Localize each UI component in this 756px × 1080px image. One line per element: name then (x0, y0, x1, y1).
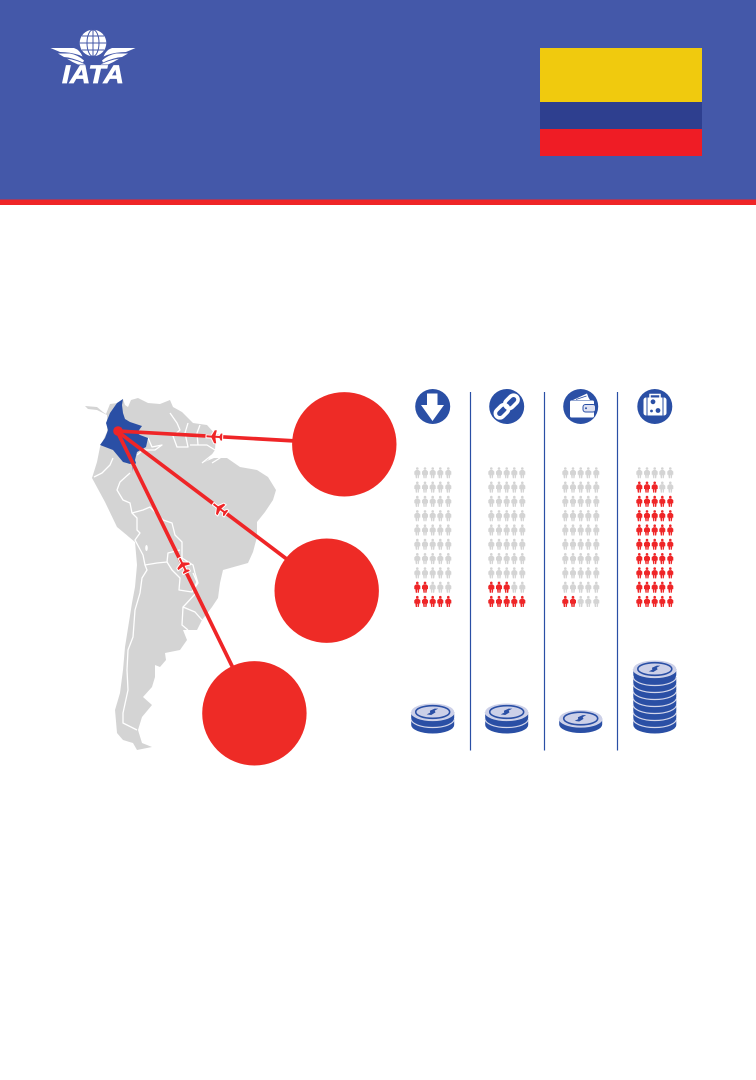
IATA logo (50, 30, 136, 89)
map: South America (85, 398, 276, 750)
icon: down arrow (415, 389, 450, 424)
header band (0, 0, 756, 205)
small lake (145, 545, 148, 551)
people chart: column two (488, 467, 525, 607)
people chart: column four (636, 467, 673, 607)
country borders (94, 413, 220, 730)
coin stack: column three (559, 710, 602, 733)
people chart: column three (562, 467, 599, 607)
coin stack: column two (485, 704, 528, 734)
coin stack: column one (411, 704, 454, 734)
Colombian flag (540, 48, 702, 156)
people chart: column one (414, 467, 451, 607)
coin stack: column four (633, 660, 676, 734)
continent landmass (85, 398, 276, 750)
icon: chain link (489, 389, 524, 424)
IATA logo: IATA (62, 61, 124, 89)
flight routes (117, 431, 296, 668)
plane icon: route two (210, 499, 230, 519)
destination circle three (202, 661, 307, 766)
icon: wallet (563, 389, 598, 424)
origin marker (113, 426, 123, 436)
Colombia highlighted (100, 399, 148, 472)
column dividers (470, 392, 618, 750)
destination circle one (292, 392, 396, 496)
destination circle two (274, 538, 379, 643)
plane icon: route three (174, 555, 192, 575)
icon: suitcase (637, 389, 672, 424)
plane icon: route one (206, 430, 223, 444)
